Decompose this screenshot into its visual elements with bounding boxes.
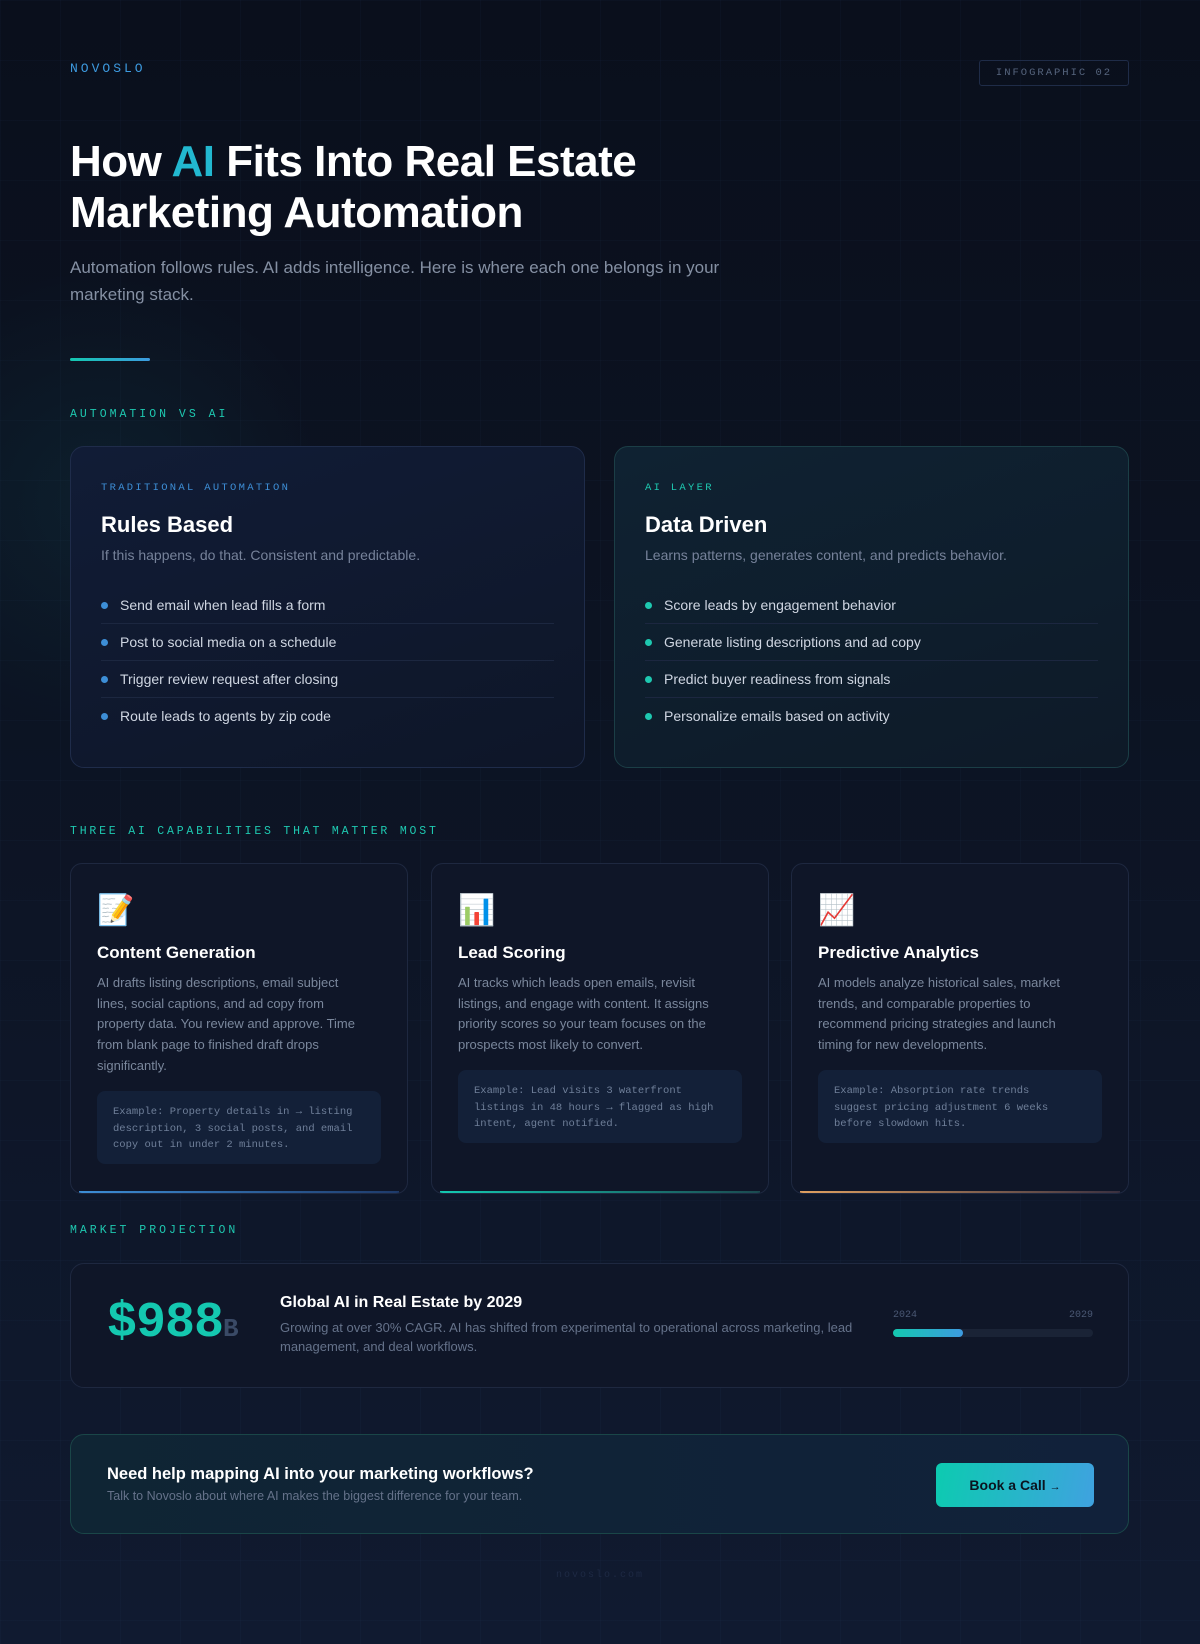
- panel: market projection: [70, 1263, 1129, 1388]
- panel: ai layer: Personalize emails based on activity: [664, 708, 890, 724]
- panel: ai layer: Score leads by engagement behavior: [664, 597, 896, 613]
- badge: INFOGRAPHIC 02: [996, 67, 1112, 79]
- title: How AI Fits Into Real Estate: [70, 137, 636, 186]
- section label: capabilities: THREE AI CAPABILITIES THAT MATTER MOST: [70, 825, 439, 838]
- panel: ai layer: Predict buyer readiness from signals: [664, 671, 890, 687]
- heading: Global AI in Real Estate by 2029: [280, 1294, 522, 1311]
- panel: predictive analytics: AI models analyze historical sales, market trends, and comparable properties to recommend pricing strategies and launch timing for new developments.: [818, 975, 1060, 1052]
- panel: ai layer: [614, 446, 1129, 768]
- accent bar: [70, 358, 150, 361]
- panel: traditional automation: Post to social media on a schedule: [120, 634, 336, 650]
- panel: predictive analytics: [791, 863, 1129, 1194]
- badge: [979, 60, 1129, 86]
- panel: predictive analytics: 📈: [818, 893, 855, 928]
- panel: content generation: Content Generation: [97, 943, 256, 962]
- progress bar: 2024: [893, 1310, 917, 1321]
- panel: lead scoring: Example: Lead visits 3 waterfront listings in 48 hours → flagged as high intent, agent notified.: [474, 1085, 713, 1130]
- list: automation items: [101, 597, 554, 724]
- panel: traditional automation: Send email when lead fills a form: [120, 597, 325, 613]
- panel: traditional automation: TRADITIONAL AUTOMATION: [101, 482, 290, 494]
- subtitle: Automation follows rules. AI adds intelligence. Here is where each one belongs in your marketing stack.: [70, 258, 719, 304]
- panel: traditional automation: If this happens, do that. Consistent and predictable.: [101, 547, 420, 563]
- stat: $988B: [107, 1295, 238, 1352]
- panel: content generation: Example: Property details in → listing description, 3 social posts, and email copy out in under 2 minutes.: [113, 1106, 352, 1151]
- panel: lead scoring: AI tracks which leads open emails, revisit listings, and engage with content. It assigns priority scores so your team focuses on the prospects most likely to convert.: [458, 975, 709, 1052]
- panel: content generation: 📝: [97, 893, 134, 928]
- progress bar: 2029: [1069, 1310, 1093, 1321]
- cta panel: [70, 1434, 1129, 1534]
- panel: traditional automation: Trigger review request after closing: [120, 671, 338, 687]
- panel: lead scoring: [431, 863, 769, 1194]
- list: ai items: [645, 597, 1098, 724]
- panel: traditional automation: Route leads to agents by zip code: [120, 708, 331, 724]
- panel: traditional automation: [70, 446, 585, 768]
- brand: NOVOSLO: [70, 61, 146, 76]
- progress bar: [893, 1310, 1093, 1337]
- section label: automation vs ai: AUTOMATION VS AI: [70, 408, 228, 421]
- panel: predictive analytics: Example: Absorption rate trends suggest pricing adjustment 6 weeks before slowdown hits.: [834, 1085, 1048, 1130]
- cta panel: Need help mapping AI into your marketing workflows?: [107, 1465, 534, 1483]
- title: [70, 137, 636, 237]
- panel: lead scoring: 📊: [458, 893, 495, 928]
- panel: predictive analytics: Predictive Analytics: [818, 943, 979, 962]
- cta panel: Talk to Novoslo about where AI makes the biggest difference for your team.: [107, 1489, 522, 1503]
- button: [936, 1463, 1094, 1507]
- panel: market projection: Growing at over 30% CAGR. AI has shifted from experimental to operational across marketing, lead management, and deal workflows.: [280, 1320, 852, 1354]
- button: Book a Call →: [969, 1477, 1061, 1493]
- section label: market projection: MARKET PROJECTION: [70, 1224, 238, 1237]
- panel: ai layer: Data Driven: [645, 512, 767, 537]
- title: Marketing Automation: [70, 188, 523, 237]
- panel: content generation: [70, 863, 408, 1194]
- panel: content generation: AI drafts listing descriptions, email subject lines, social captions, and ad copy from property data. You review and approve. Time from blank page to finished draft drops significantly.: [97, 975, 355, 1073]
- panel: traditional automation: Rules Based: [101, 512, 233, 537]
- panel: ai layer: AI LAYER: [645, 482, 714, 494]
- panel: ai layer: Learns patterns, generates content, and predicts behavior.: [645, 547, 1007, 563]
- panel: ai layer: Generate listing descriptions and ad copy: [664, 634, 921, 650]
- footer: novoslo.com: [556, 1570, 644, 1581]
- panel: lead scoring: Lead Scoring: [458, 943, 566, 962]
